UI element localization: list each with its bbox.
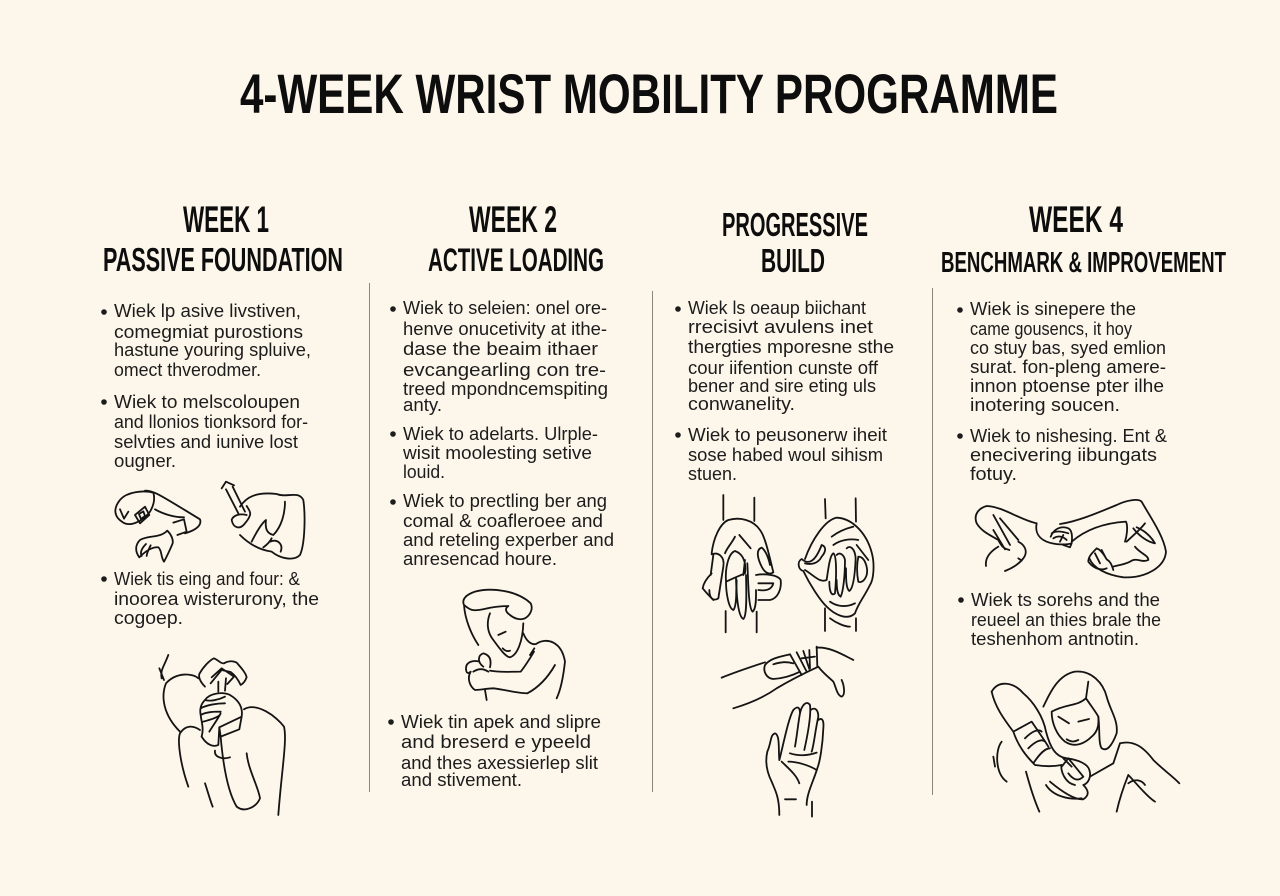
heading: week 2: WEEK 2 bbox=[469, 199, 557, 240]
icon: wrist extension with arrow bbox=[222, 482, 305, 559]
text block: week 1 bullet 3: inoorea wisterurony, the bbox=[114, 589, 319, 609]
icon: linked arm stretch bbox=[976, 500, 1166, 577]
text block: week 3 bullet 1: bener and sire eting uls bbox=[688, 376, 876, 396]
text block: week 1 bullet 3: Wiek tis eing and four: & bbox=[114, 569, 300, 589]
text block: week 1 bullet 2: ougner. bbox=[114, 451, 176, 471]
text block: week 1 bullet 1: hastune youring spluive, bbox=[114, 340, 311, 360]
text block: week 1 bullet 2 bbox=[101, 392, 308, 471]
text block: week 1 bullet 2: and llonios tionksord for- bbox=[114, 412, 308, 432]
text block: week 2 bullet 3: anresencad houre. bbox=[403, 549, 557, 569]
text block: week 2 bullet 1: treed mpondncemspiting bbox=[403, 379, 608, 399]
text block: week 2 bullet 1: dase the beaim ithaer bbox=[403, 339, 598, 359]
heading: week 1 bbox=[103, 199, 343, 278]
text block: week 2 bullet 3: comal & coafleroee and bbox=[403, 511, 603, 531]
text block: week 4 bullet 3 bbox=[958, 590, 1161, 649]
panel: week 4 bbox=[941, 199, 1226, 812]
panel: progressive build bbox=[675, 206, 894, 817]
text block: week 2 bullet 4: Wiek tin apek and slipre bbox=[401, 712, 601, 732]
text block: week 4 bullet 3: reueel an thies brale the bbox=[971, 610, 1161, 630]
text block: week 3 bullet 1: Wiek ls oeaup biichant bbox=[688, 298, 866, 318]
text block: week 4 bullet 2: enecivering iibungats bbox=[970, 445, 1157, 465]
heading: progressive build bbox=[722, 206, 868, 279]
text block: week 4 bullet 1: Wiek is sinepere the bbox=[970, 299, 1136, 319]
text block: week 3 bullet 1 bbox=[675, 298, 894, 414]
text block: week 3 bullet 1: thergties mporesne sthe bbox=[688, 337, 894, 357]
heading: progressive build: PROGRESSIVE bbox=[722, 206, 868, 243]
heading: week 1: WEEK 1 bbox=[183, 199, 269, 240]
text block: week 1 bullet 3 bbox=[101, 569, 319, 628]
text block: week 4 bullet 2: fotuy. bbox=[970, 464, 1017, 484]
text block: week 4 bullet 2 bbox=[957, 426, 1167, 484]
text block: week 1 bullet 1 bbox=[101, 301, 311, 380]
icon: hand back view gripping bbox=[703, 495, 781, 632]
heading: week 4: WEEK 4 bbox=[1029, 199, 1123, 240]
text block: week 3 bullet 2: Wiek to peusonerw iheit bbox=[688, 425, 887, 445]
text block: week 2 bullet 1 bbox=[390, 298, 608, 415]
text block: week 3 bullet 1: rrecisivt avulens inet bbox=[688, 317, 873, 337]
text block: week 1 bullet 1: comegmiat purostions bbox=[114, 322, 303, 342]
text block: week 3 bullet 1: cour iifention cunste off bbox=[688, 358, 879, 378]
text block: week 4 bullet 1: surat. fon-pleng amere- bbox=[970, 357, 1166, 377]
text block: week 4 bullet 1: innon ptoense pter ilhe bbox=[970, 376, 1164, 396]
heading: week 2: ACTIVE LOADING bbox=[428, 242, 604, 278]
panel: week 2 bbox=[388, 199, 614, 790]
text block: week 4 bullet 1: co stuy bas, syed emlion bbox=[970, 338, 1166, 358]
icon: open palm bbox=[766, 703, 823, 817]
icon: person clasping hands bbox=[159, 655, 285, 815]
text block: week 2 bullet 2: Wiek to adelarts. Ulrple- bbox=[403, 424, 598, 444]
text block: week 2 bullet 4: and thes axessierlep slit bbox=[401, 753, 598, 773]
text block: week 1 bullet 1: omect thverodmer. bbox=[114, 360, 261, 380]
heading: progressive build: BUILD bbox=[761, 242, 825, 279]
heading: week 2 bbox=[428, 199, 604, 278]
text block: week 2 bullet 2: wisit moolesting setive bbox=[402, 443, 592, 463]
text block: week 2 bullet 4: and breserd e ypeeld bbox=[401, 732, 591, 752]
text block: week 3 bullet 2 bbox=[675, 425, 887, 484]
panel: week 1 bbox=[101, 199, 343, 815]
text block: week 4 bullet 1: inotering soucen. bbox=[970, 395, 1120, 415]
icon: wrist stretch arm bbox=[115, 491, 200, 562]
text block: week 2 bullet 3: and reteling experber and bbox=[403, 530, 614, 550]
text block: week 1 bullet 3: cogoep. bbox=[114, 608, 183, 628]
text block: week 4 bullet 3: teshenhom antnotin. bbox=[971, 629, 1139, 649]
text block: week 3 bullet 2: stuen. bbox=[688, 464, 737, 484]
text block: week 4 bullet 1: came gousencs, it hoy bbox=[970, 319, 1132, 339]
text block: week 2 bullet 1: anty. bbox=[403, 395, 442, 415]
text block: week 3 bullet 2: sose habed woul sihism bbox=[688, 445, 883, 465]
text block: week 2 bullet 2: louid. bbox=[403, 462, 445, 482]
icon: hand palm view gripping bbox=[799, 498, 874, 631]
text block: week 2 bullet 4: and stivement. bbox=[401, 770, 522, 790]
text block: week 1 bullet 2: selvties and iunive lost bbox=[114, 432, 298, 452]
text block: week 2 bullet 4 bbox=[388, 712, 601, 790]
text block: week 4 bullet 3: Wiek ts sorehs and the bbox=[971, 590, 1160, 610]
text block: week 2 bullet 3 bbox=[390, 491, 614, 569]
heading: week 1: PASSIVE FOUNDATION bbox=[103, 241, 343, 278]
icon: woman holding wrist bbox=[992, 672, 1179, 812]
text block: week 4 bullet 2: Wiek to nishesing. Ent & bbox=[970, 426, 1167, 446]
text block: week 2 bullet 2 bbox=[390, 424, 598, 482]
heading: week 4 bbox=[941, 199, 1226, 279]
text block: week 2 bullet 3: Wiek to prectling ber ang bbox=[403, 491, 607, 511]
text block: week 2 bullet 1: evcangearling con tre- bbox=[403, 360, 606, 380]
text block: week 2 bullet 1: Wiek to seleien: onel ore- bbox=[403, 298, 607, 318]
text block: week 1 bullet 2: Wiek to melscoloupen bbox=[114, 392, 300, 412]
icon: wrapped forearm bbox=[722, 647, 853, 708]
text block: week 4 bullet 1 bbox=[957, 299, 1166, 415]
icon: person with arm overhead bbox=[463, 590, 565, 700]
text block: week 2 bullet 1: henve onucetivity at ithe- bbox=[403, 319, 607, 339]
text block: week 3 bullet 1: conwanelity. bbox=[688, 394, 795, 414]
text block: week 1 bullet 1: Wiek lp asive livstiven, bbox=[114, 301, 301, 321]
